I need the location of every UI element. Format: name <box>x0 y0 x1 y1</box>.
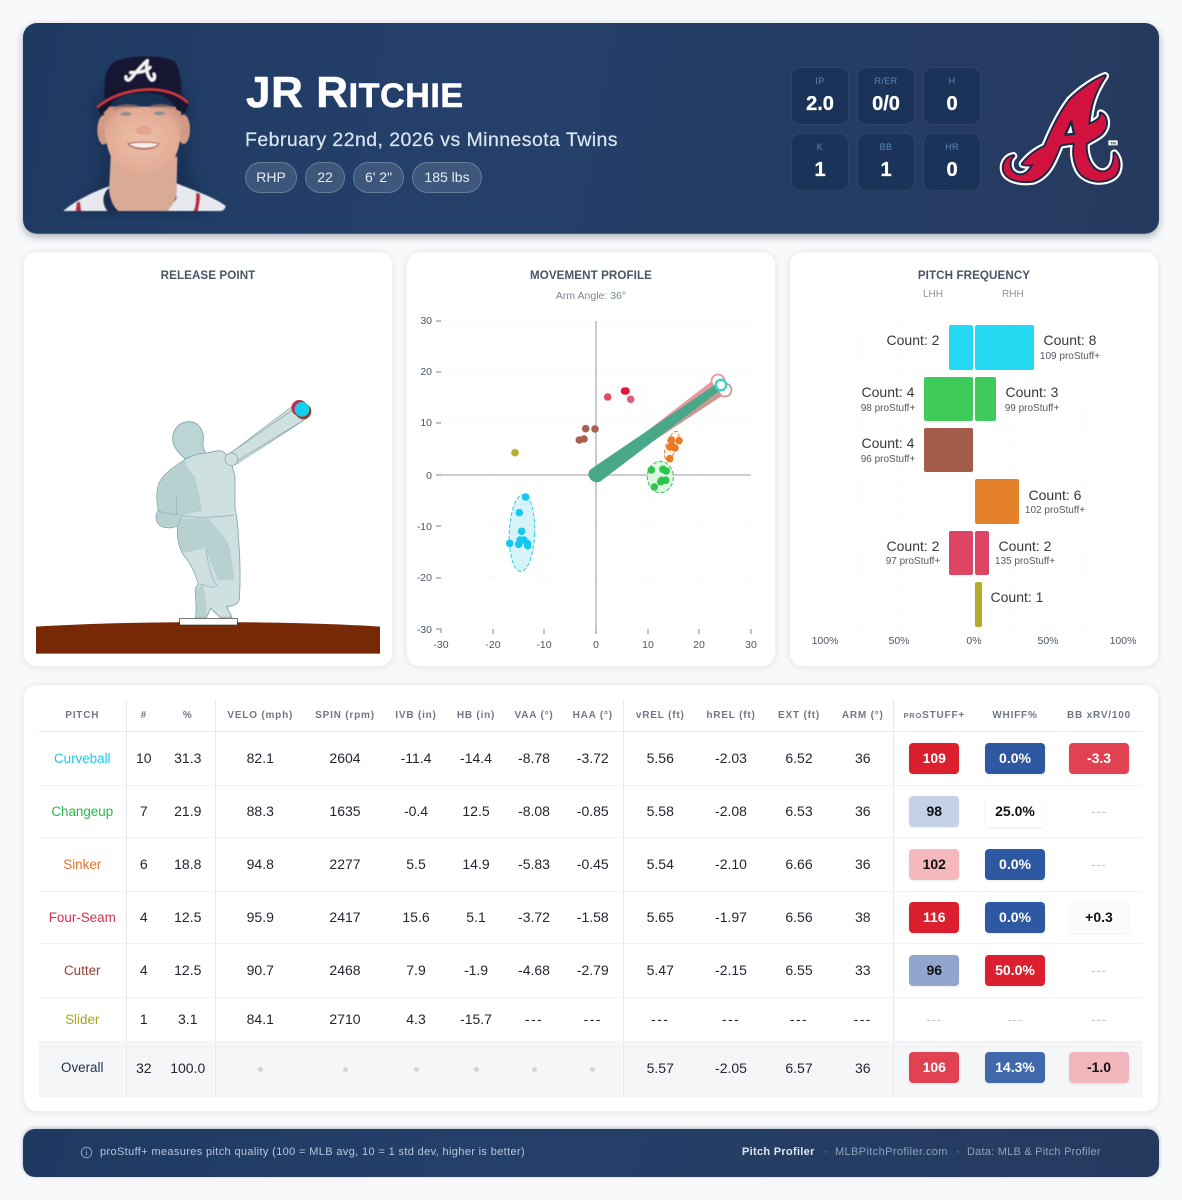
bar row: four-seam <box>886 531 1055 575</box>
row: four-seam: 4 <box>140 909 148 925</box>
stat: walks: 1 <box>880 159 892 181</box>
table header row: VELO (mph) <box>227 710 293 721</box>
stat: innings pitched: IP <box>815 76 825 86</box>
header banner <box>23 23 1159 234</box>
row: four-seam: 15.6 <box>402 909 430 925</box>
row: curveball: -3.72 <box>577 750 609 766</box>
pill: height: 6' 2" <box>365 169 392 185</box>
row: curveball: -3.3 <box>1087 750 1111 766</box>
footer bar <box>23 1129 1159 1177</box>
row: slider: --- <box>1091 1011 1107 1027</box>
panel: pitch metrics table card <box>23 684 1159 1112</box>
row: changeup: -2.08 <box>715 803 747 819</box>
row: slider: --- <box>854 1011 872 1027</box>
chart: pitch frequency gridlines <box>862 318 1086 630</box>
text: Count: 4 <box>862 435 914 451</box>
row: cutter: --- <box>1091 962 1107 978</box>
table header row: hREL (ft) <box>706 710 756 721</box>
row: curveball: 109 <box>923 750 946 766</box>
row: curveball: 6.52 <box>785 750 813 766</box>
row: sinker: 18.8 <box>174 856 201 872</box>
row: overall: 32 <box>136 1060 152 1076</box>
footer note: proStuff+ measures pitch quality (100 = MLB avg, 10 = 1 std dev, higher is better) <box>100 1146 525 1158</box>
row: slider: --- <box>926 1011 942 1027</box>
row: overall: 106 <box>923 1059 946 1075</box>
row: changeup: 7 <box>140 803 148 819</box>
row: cutter: 90.7 <box>247 962 274 978</box>
table header row: SPIN (rpm) <box>315 710 375 721</box>
row: changeup: 21.9 <box>174 803 201 819</box>
row: changeup: -0.85 <box>577 803 609 819</box>
chart: movement scatter plot: -30 <box>417 624 432 636</box>
row: slider: --- <box>722 1011 740 1027</box>
chart: pitcher silhouette with release points <box>36 400 380 654</box>
table header row: PITCH <box>65 710 99 721</box>
pill: age: 22 <box>317 169 333 185</box>
label: right-handed hitters: RHH <box>1002 289 1024 300</box>
row: slider: -15.7 <box>460 1011 492 1027</box>
row: four-seam <box>49 902 1129 934</box>
pill: weight <box>412 162 482 193</box>
footer data source: Data: MLB & Pitch Profiler <box>967 1146 1101 1158</box>
table header row: % <box>183 710 193 721</box>
stat: walks <box>857 133 915 191</box>
icon: team logo: TM <box>1110 140 1117 145</box>
pill: weight: 185 lbs <box>424 169 470 185</box>
row: changeup: 88.3 <box>247 803 274 819</box>
chart: movement scatter plot: -20 <box>485 639 501 651</box>
heading: movement profile: MOVEMENT PROFILE <box>530 269 652 282</box>
text: Count: 1 <box>991 589 1043 605</box>
row: sinker: -0.45 <box>577 856 609 872</box>
row: slider: --- <box>651 1011 669 1027</box>
table header row: EXT (ft) <box>778 710 820 721</box>
row: sinker: Sinker <box>63 856 101 872</box>
row: four-seam: 0.0% <box>999 908 1031 924</box>
row: four-seam: 5.1 <box>466 909 486 925</box>
row: sinker: --- <box>1091 856 1107 872</box>
chart: movement scatter plot: 20 <box>420 366 432 378</box>
row: sinker: 5.5 <box>406 856 426 872</box>
stat: walks: BB <box>880 142 892 152</box>
text: 102 proStuff+ <box>1025 505 1085 516</box>
stat: home runs <box>923 133 981 191</box>
table header row: VAA (°) <box>514 710 554 721</box>
row: slider: 3.1 <box>178 1011 197 1027</box>
row: cutter: 7.9 <box>406 962 426 978</box>
table header row: IVB (in) <box>395 710 437 721</box>
row: sinker: 102 <box>923 856 946 872</box>
panel: pitch frequency <box>789 251 1159 667</box>
panel: movement profile <box>406 251 776 667</box>
row: slider: --- <box>584 1011 602 1027</box>
text: 135 proStuff+ <box>995 556 1055 567</box>
row: four-seam: -3.72 <box>518 909 550 925</box>
text: 109 proStuff+ <box>1040 351 1100 362</box>
row: cutter: 96 <box>926 962 942 978</box>
footer brand: Pitch Profiler <box>742 1146 815 1158</box>
pill: height <box>353 162 404 193</box>
stat: hits <box>923 67 981 125</box>
text: Count: 2 <box>887 538 939 554</box>
pill: age <box>305 162 345 193</box>
stat: innings pitched: 2.0 <box>806 93 834 115</box>
row: changeup: 12.5 <box>462 803 490 819</box>
separator dot: · <box>956 1146 960 1158</box>
row: sinker: 14.9 <box>462 856 490 872</box>
row: cutter: -2.79 <box>577 962 609 978</box>
row: changeup: 98 <box>926 802 942 818</box>
player name: JR RITCHIE <box>246 68 464 117</box>
game date and opponent: February 22nd, 2026 vs Minnesota Twins <box>245 129 618 151</box>
chart: movement scatter plot <box>417 315 757 651</box>
row: slider: 4.3 <box>406 1011 426 1027</box>
chart: movement scatter plot: 30 <box>420 315 432 327</box>
stat: home runs: HR <box>945 142 959 152</box>
row: changeup: 25.0% <box>995 802 1035 818</box>
row: curveball: 0.0% <box>999 750 1031 766</box>
row: four-seam: -1.58 <box>577 909 609 925</box>
text: Count: 2 <box>999 538 1051 554</box>
bar row: curveball <box>887 325 1100 370</box>
separator dot: · <box>824 1146 828 1158</box>
chart: movement scatter plot: -30 <box>433 639 449 651</box>
icon: info <box>80 1146 92 1158</box>
text: 50% <box>888 635 910 647</box>
row: cutter: 2468 <box>329 962 361 978</box>
pill: handedness: RHP <box>256 169 286 185</box>
pill: handedness <box>245 162 297 193</box>
chart: movement scatter plot: 10 <box>642 639 654 651</box>
stat: strikeouts <box>791 133 849 191</box>
stat: strikeouts: K <box>817 142 823 152</box>
text: 100% <box>812 635 838 647</box>
table header row: HAA (°) <box>573 710 613 721</box>
text: 0% <box>966 635 982 647</box>
row: curveball: -2.03 <box>715 750 747 766</box>
row: changeup: --- <box>1091 803 1107 819</box>
row: cutter: 6.55 <box>785 962 813 978</box>
row: slider: Slider <box>65 1012 99 1026</box>
row: curveball: Curveball <box>54 750 111 766</box>
row: slider <box>65 1011 1107 1027</box>
row: overall <box>39 1042 1143 1097</box>
row: changeup: 36 <box>855 803 871 819</box>
text: Count: 3 <box>1006 384 1058 400</box>
chart: movement scatter plot: 10 <box>420 417 432 429</box>
row: cutter: -4.68 <box>518 962 550 978</box>
chart: movement scatter plot: 20 <box>693 639 705 651</box>
row: overall: 14.3% <box>995 1059 1035 1075</box>
table header row: HB (in) <box>457 710 495 721</box>
row: four-seam: 95.9 <box>247 909 274 925</box>
row: cutter: 12.5 <box>174 962 201 978</box>
heading: pitch frequency: PITCH FREQUENCY <box>918 269 1030 282</box>
row: cutter: 5.47 <box>647 962 674 978</box>
frequency axis labels <box>812 635 1136 647</box>
text: 99 proStuff+ <box>1005 403 1059 414</box>
table header row <box>39 710 1143 1097</box>
row: slider: --- <box>525 1011 543 1027</box>
row: cutter: -1.9 <box>464 962 488 978</box>
row: changeup: 6.53 <box>785 803 813 819</box>
row: changeup <box>51 796 1107 828</box>
chart: movement scatter plot: 30 <box>745 639 757 651</box>
row: overall: 36 <box>855 1060 871 1076</box>
chart: movement scatter plot: 0 <box>593 639 599 651</box>
row: changeup: -0.4 <box>404 803 428 819</box>
stat: runs and earned runs <box>857 67 915 125</box>
row: cutter: 33 <box>855 962 871 978</box>
subheading: arm angle: Arm Angle: 36° <box>556 290 626 302</box>
row: four-seam: 5.65 <box>647 909 674 925</box>
chart: movement scatter plot: 0 <box>426 470 432 482</box>
pitch clusters <box>506 387 683 572</box>
row: slider: 1 <box>140 1011 148 1027</box>
row: sinker: 6.66 <box>785 856 813 872</box>
row: curveball: -14.4 <box>460 750 492 766</box>
chart: movement scatter plot: -10 <box>536 639 552 651</box>
bar row: slider <box>975 582 1043 627</box>
row: overall: -2.05 <box>715 1060 747 1076</box>
text: 100% <box>1110 635 1136 647</box>
row: cutter: Cutter <box>64 962 100 978</box>
row: sinker <box>63 849 1107 881</box>
row: curveball: 36 <box>855 750 871 766</box>
text: 96 proStuff+ <box>861 454 915 465</box>
arm angle lines <box>596 374 732 475</box>
bar row: cutter <box>861 428 973 472</box>
row: overall: -1.0 <box>1087 1059 1111 1075</box>
table header row: vREL (ft) <box>636 710 685 721</box>
table header row: ARM (°) <box>842 710 884 721</box>
row: cutter <box>64 955 1107 987</box>
bar row: changeup <box>861 377 1059 421</box>
row: four-seam: -1.97 <box>715 909 747 925</box>
row: cutter: 50.0% <box>995 962 1035 978</box>
row: slider: --- <box>790 1011 808 1027</box>
text: 97 proStuff+ <box>886 556 940 567</box>
text: 98 proStuff+ <box>861 403 915 414</box>
heading: release point: RELEASE POINT <box>161 269 255 282</box>
table header row: BB xRV/100 <box>1067 710 1131 721</box>
chart: movement scatter plot: -10 <box>417 521 432 533</box>
panel: release point <box>23 251 393 667</box>
text: 50% <box>1037 635 1059 647</box>
row: overall: 6.57 <box>785 1060 813 1076</box>
row: curveball: -11.4 <box>401 750 431 766</box>
row: sinker: 94.8 <box>247 856 274 872</box>
row: slider: --- <box>1007 1011 1023 1027</box>
footer site: MLBPitchProfiler.com <box>835 1146 948 1158</box>
text: Count: 4 <box>862 384 914 400</box>
row: overall: Overall <box>61 1060 103 1075</box>
row: slider: 2710 <box>329 1011 361 1027</box>
stat: strikeouts: 1 <box>814 159 826 181</box>
row: four-seam: 38 <box>855 909 871 925</box>
row: curveball: 82.1 <box>247 750 274 766</box>
table header row: PROSTUFF+ <box>903 710 965 721</box>
stat: hits: 0 <box>946 93 958 115</box>
icon: team logo <box>1000 72 1123 186</box>
row: four-seam: 6.56 <box>785 909 813 925</box>
row: four-seam: Four-Seam <box>49 910 116 924</box>
stat: hits: H <box>949 76 955 86</box>
text: Count: 6 <box>1029 487 1081 503</box>
row: sinker: 2277 <box>329 856 361 872</box>
row: changeup: 5.58 <box>647 803 674 819</box>
row: sinker: -2.10 <box>715 856 747 872</box>
row: changeup: -8.08 <box>518 803 550 819</box>
bar row: sinker <box>975 479 1085 524</box>
stat: home runs: 0 <box>946 159 958 181</box>
row: changeup: 1635 <box>329 803 361 819</box>
row: sinker: 5.54 <box>647 856 674 872</box>
row: four-seam: 2417 <box>329 909 361 925</box>
row: overall: 100.0 <box>170 1060 205 1076</box>
row: four-seam: 116 <box>923 908 946 924</box>
row: curveball: -8.78 <box>518 750 550 766</box>
row: slider: 84.1 <box>247 1011 274 1027</box>
row: cutter: 4 <box>140 962 148 978</box>
row: sinker: 36 <box>855 856 871 872</box>
row: sinker: 6 <box>140 856 148 872</box>
table header row: # <box>141 710 147 721</box>
stat: runs and earned runs: R/ER <box>874 76 898 86</box>
table header row: WHIFF% <box>992 710 1038 721</box>
row: overall: 5.57 <box>647 1060 674 1076</box>
row: curveball <box>54 743 1129 775</box>
stat: innings pitched <box>791 67 849 125</box>
row: sinker: -5.83 <box>518 856 550 872</box>
row: curveball: 31.3 <box>174 750 201 766</box>
row: cutter: -2.15 <box>715 962 747 978</box>
table: pitch metrics <box>39 700 1143 1097</box>
row: sinker: 0.0% <box>999 856 1031 872</box>
row: curveball: 2604 <box>329 750 361 766</box>
row: changeup: Changeup <box>51 804 113 818</box>
row: curveball: 10 <box>136 750 152 766</box>
label: left-handed hitters: LHH <box>923 289 943 300</box>
stat: runs and earned runs: 0/0 <box>872 93 900 115</box>
chart: movement scatter plot: -20 <box>417 572 432 584</box>
row: four-seam: 12.5 <box>174 909 201 925</box>
text: Count: 8 <box>1044 332 1096 348</box>
row: four-seam: +0.3 <box>1085 908 1113 924</box>
text: Count: 2 <box>887 332 939 348</box>
player headshot <box>63 56 226 214</box>
row: curveball: 5.56 <box>647 750 674 766</box>
